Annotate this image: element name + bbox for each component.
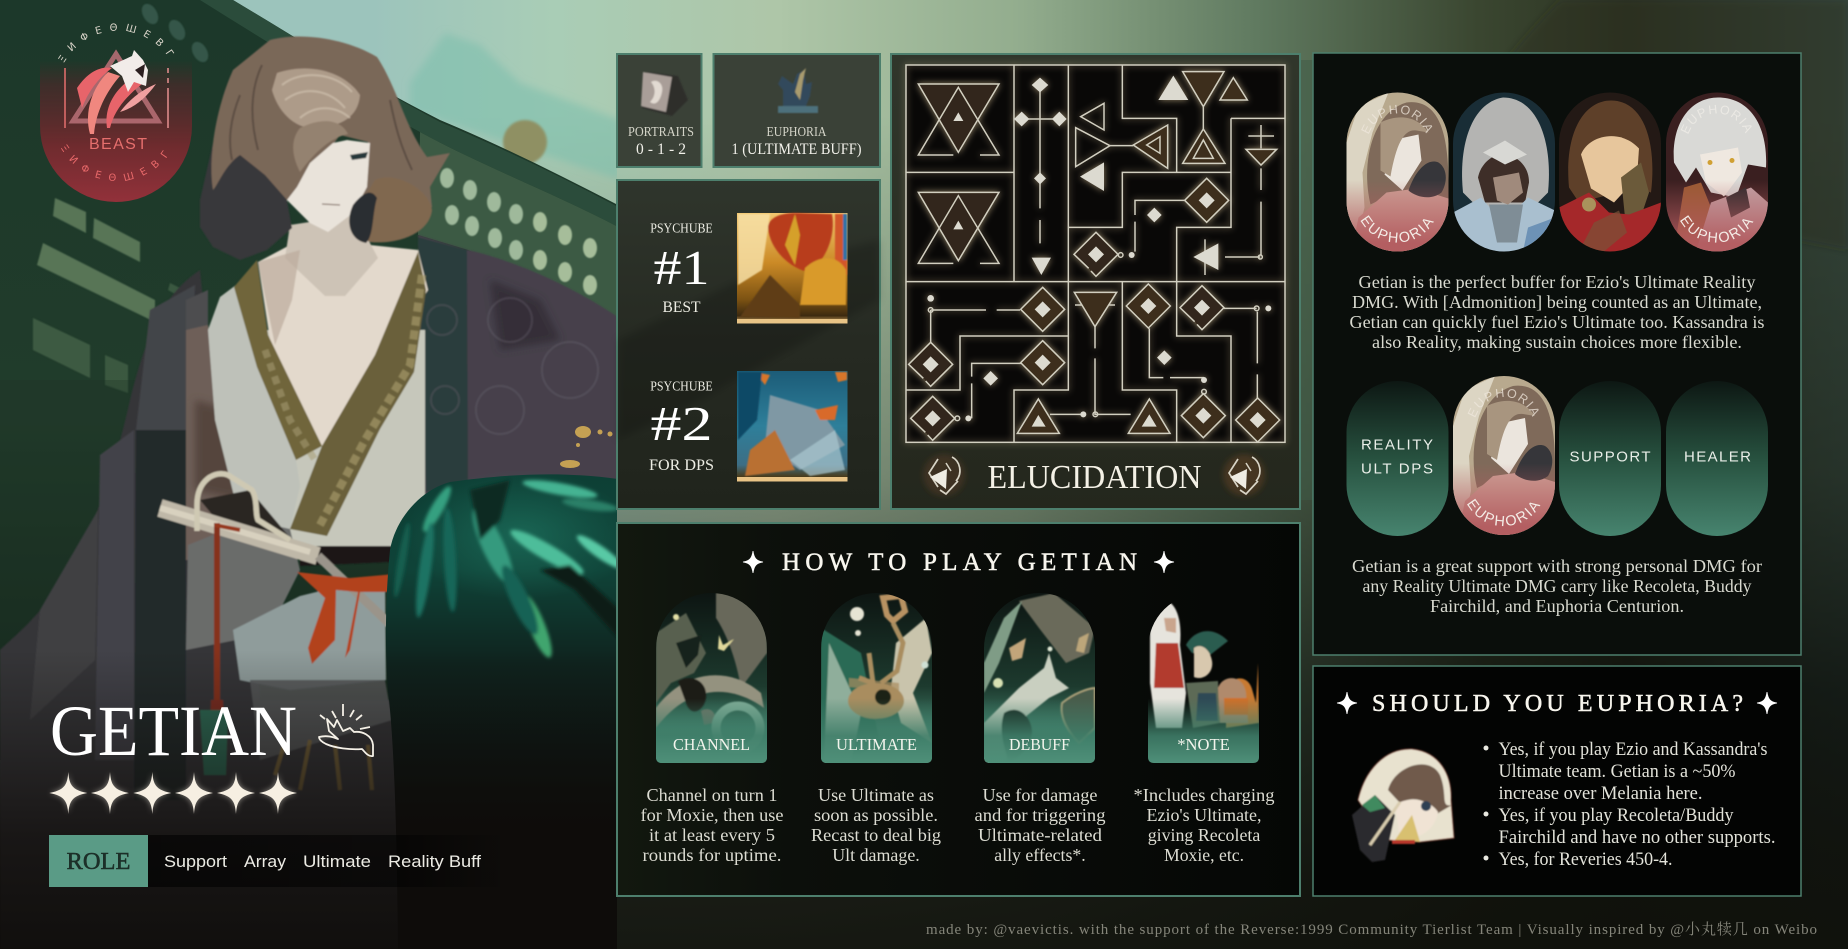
card: channel: [656, 593, 767, 763]
panel: portraits: PORTRAITS: [628, 124, 694, 139]
portrait: ezio: [1453, 92, 1555, 252]
bullet list: Ultimate team. Getian is a ~50%: [1498, 762, 1736, 782]
slot: reality ult dps: [1346, 381, 1448, 536]
text: debuff: [974, 785, 1106, 865]
card: ultimate: ULTIMATE: [836, 735, 917, 754]
psychube card 1: [737, 213, 848, 324]
panel: how to play: [617, 523, 1300, 896]
psychube 1 labels: PSYCHUBE: [650, 220, 713, 236]
psychube 2 labels: FOR DPS: [649, 457, 714, 474]
text: team two: Fairchild, and Euphoria Centurion.: [1430, 596, 1684, 616]
text: ultimate: soon as possible.: [814, 805, 938, 825]
slot: healer: [1666, 381, 1768, 536]
text: team one: DMG. With [Admonition] being counted as an Ultimate,: [1352, 292, 1762, 312]
bullet list: Fairchild and have no other supports.: [1498, 828, 1776, 848]
elucidation glyph grid: [906, 65, 1285, 442]
panel: euphoria: 1 (ULTIMATE BUFF): [732, 141, 862, 158]
hair and face: [200, 143, 292, 260]
icon: euphoria statue: [778, 68, 818, 113]
text: note: giving Recoleta: [1148, 825, 1260, 845]
role bar: Reality Buff: [388, 852, 481, 871]
icon: portrait film: [641, 72, 688, 116]
text: channel: rounds for uptime.: [642, 845, 782, 865]
panel: psychube: [617, 180, 880, 509]
psychube 1 labels: #1: [654, 240, 710, 295]
gold beads: [560, 426, 612, 468]
text: team one: Getian can quickly fuel Ezio's Ultimate too. Kassandra is: [1350, 312, 1765, 332]
text: channel: for Moxie, then use: [640, 805, 784, 825]
card: ultimate: [821, 593, 932, 763]
slot: reality ult dps: REALITY: [1361, 436, 1433, 454]
card: debuff: [984, 593, 1095, 763]
role bar: Array: [244, 852, 287, 871]
embroidered collar: [234, 260, 322, 460]
psychube 2 labels: PSYCHUBE: [650, 378, 713, 394]
panel: teams: [1312, 52, 1802, 656]
portrait: euphoria centurion: EUPHORIA: [1680, 215, 1754, 243]
slot: getian: [1453, 376, 1555, 535]
bullet list: Yes, if you play Recoleta/Buddy: [1498, 806, 1734, 826]
badge triangle: [73, 54, 158, 121]
role bar: ROLE: [66, 849, 130, 875]
six star rarity: [49, 772, 297, 814]
card: debuff: DEBUFF: [1009, 735, 1070, 754]
text: note: Moxie, etc.: [1164, 845, 1244, 865]
text: note: Ezio's Ultimate,: [1146, 805, 1262, 825]
portrait: kassandra: [1559, 92, 1661, 252]
portrait: euphoria centurion: EUPHORIA: [1680, 105, 1752, 134]
card: note: [1148, 593, 1259, 763]
skirt, belt and flute: [232, 588, 387, 690]
temple roof tile details: [33, 1, 597, 393]
footer credit: made by: @vaevictis. with the support of the Reverse:1999 Community Tierlist Team | Visually inspired by @小丸犊几 on Weibo: [926, 920, 1817, 938]
role bar: [49, 835, 508, 887]
panel: portraits: [617, 54, 702, 167]
text: team one: Getian is the perfect buffer for Ezio's Ultimate Reality: [1358, 272, 1756, 292]
hero artwork: temple and character: [0, 0, 635, 949]
text: debuff: and for triggering: [974, 805, 1106, 825]
role bar: Support: [164, 852, 227, 871]
card: channel: CHANNEL: [673, 735, 750, 754]
text: team two: any Reality Ultimate DMG carry like Recoleta, Buddy: [1362, 576, 1752, 596]
text: debuff: Ultimate-related: [978, 825, 1102, 845]
psychube 2 labels: #2: [650, 396, 712, 451]
card: note: *NOTE: [1177, 735, 1230, 754]
icon: elucidation right: [1223, 454, 1265, 496]
beast class badge: [40, 23, 192, 202]
text: ultimate: Ult damage.: [832, 845, 920, 865]
dark fade: [0, 664, 398, 949]
feather wing: [386, 474, 617, 890]
chibi getian: [1352, 749, 1454, 862]
psychube 1 labels: [650, 220, 713, 316]
neck and chest: [258, 245, 428, 446]
text: channel: [640, 785, 784, 865]
text: debuff: Use for damage: [982, 785, 1098, 805]
bullet list: Yes, if you play Ezio and Kassandra's: [1498, 740, 1768, 760]
text: team two: [1352, 556, 1762, 616]
slot: healer: HEALER: [1684, 448, 1751, 466]
role bar: Ultimate: [303, 852, 371, 871]
right sleeve: [418, 235, 625, 495]
slot: support: SUPPORT: [1570, 448, 1650, 466]
slot: support: [1559, 381, 1661, 536]
bullet list: Yes, for Reveries 450-4.: [1498, 850, 1672, 870]
elucidation heading: ELUCIDATION: [988, 459, 1202, 496]
note characters: [1150, 600, 1259, 728]
text: debuff: ally effects*.: [994, 845, 1086, 865]
icon: elucidation left: [923, 454, 965, 496]
bullet list: increase over Melania here.: [1498, 784, 1702, 804]
psychube 1 labels: BEST: [662, 299, 701, 316]
panel: should you euphoria: [1313, 666, 1801, 896]
badge ring text: ΞИΦΕΘШΕΒΓ: [58, 23, 174, 62]
text: channel: it at least every 5: [649, 825, 775, 845]
character name: GETIAN: [50, 691, 297, 771]
heading: should you euphoria: SHOULD YOU EUPHORIA?: [1372, 691, 1743, 717]
text: ultimate: Recast to deal big: [811, 825, 941, 845]
character body: [0, 36, 616, 792]
panel: euphoria: [714, 54, 880, 167]
text: team one: [1350, 272, 1765, 352]
slot: reality ult dps: ULT DPS: [1361, 460, 1433, 478]
panel: elucidation: [891, 54, 1300, 509]
tassel and fringes: [200, 710, 228, 775]
text: ultimate: [811, 785, 941, 865]
text: team two: Getian is a great support with strong personal DMG for: [1352, 556, 1762, 576]
panel: euphoria: EUPHORIA: [766, 124, 827, 139]
text: channel: Channel on turn 1: [646, 785, 778, 805]
beast class badge: ΞИΦΕΘШΕΒΓ: [61, 144, 167, 181]
badge wolf head: [110, 50, 148, 92]
icon: hand with sparks: [319, 704, 373, 756]
inner robe and torso: [266, 328, 426, 548]
portrait: euphoria centurion: [1666, 92, 1768, 252]
panel: portraits: 0 - 1 - 2: [636, 141, 686, 158]
badge label: BEAST: [89, 136, 147, 153]
text: note: *Includes charging: [1134, 785, 1275, 805]
text: team one: also Reality, making sustain choices more flexible.: [1372, 332, 1742, 352]
left robe: [0, 270, 394, 791]
portrait: getian euphoria: [1346, 92, 1448, 252]
text: note: [1134, 785, 1275, 865]
text: ultimate: Use Ultimate as: [818, 785, 934, 805]
bullet list: [1484, 740, 1776, 870]
heading: how to play: HOW TO PLAY GETIAN: [782, 549, 1137, 576]
psychube 2 labels: [649, 378, 714, 474]
badge claw mark: [77, 68, 156, 134]
psychube card 2: [737, 371, 848, 482]
